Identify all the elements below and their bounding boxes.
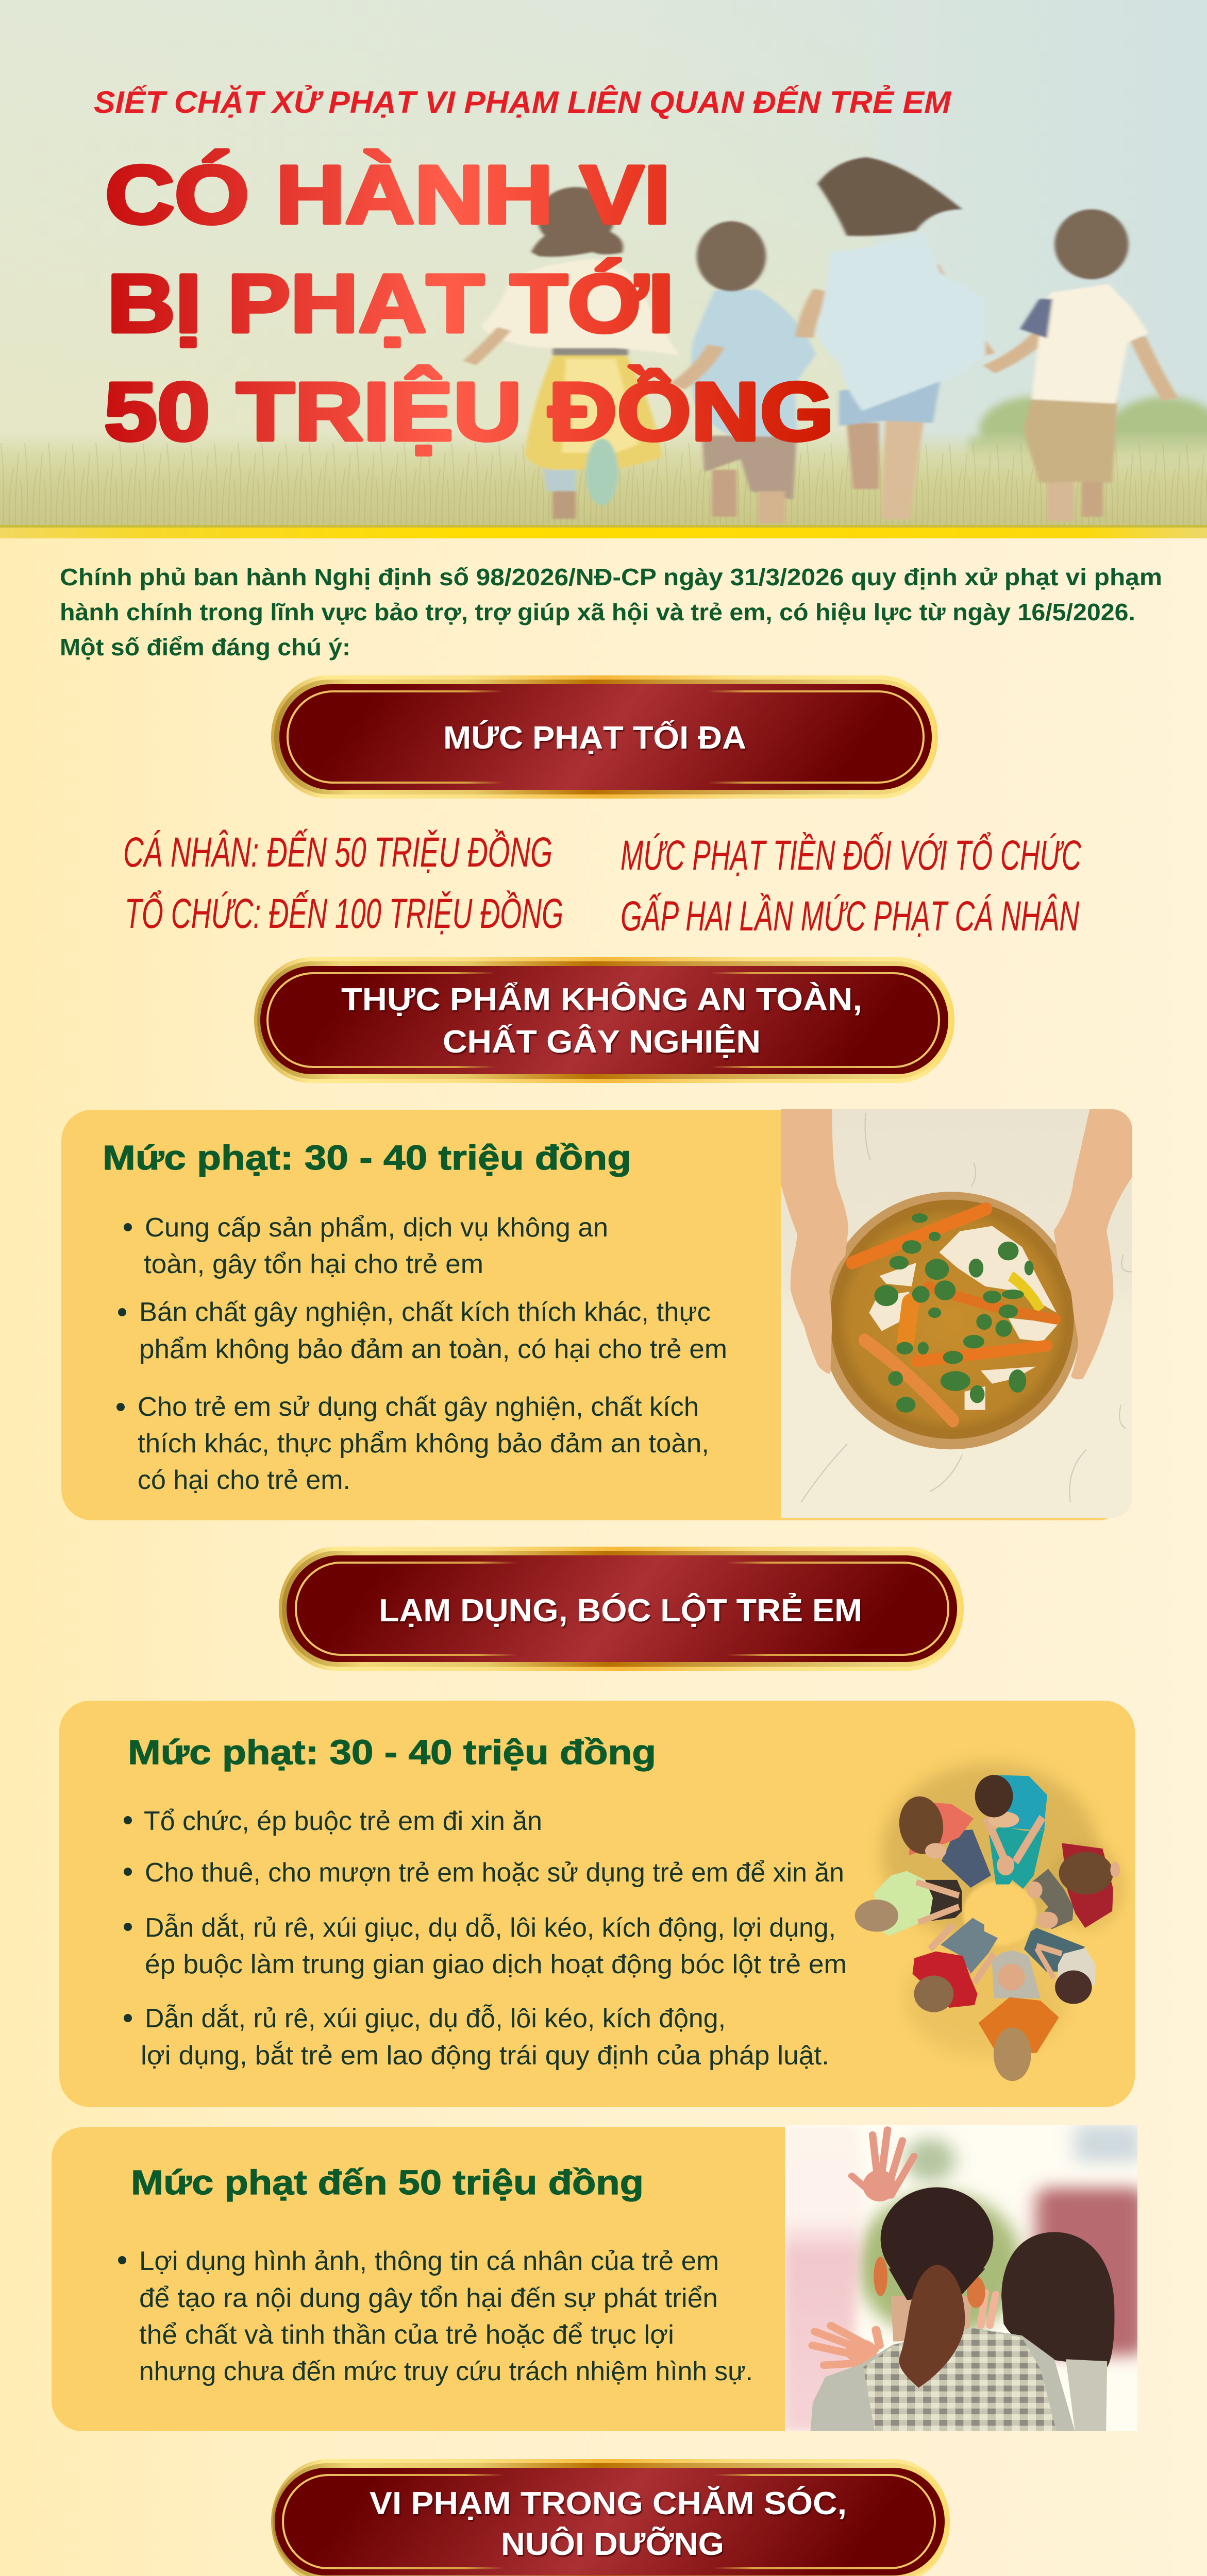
banner: mức phạt tối đa: MỨC PHẠT TỐI ĐA bbox=[443, 720, 746, 756]
bullet list: Cung cấp sản phẩm, dịch vụ không an bbox=[145, 1213, 608, 1243]
red shirt boy bottom-left bbox=[941, 1918, 998, 1974]
bullet list: Tổ chức, ép buộc trẻ em đi xin ăn bbox=[144, 1806, 542, 1836]
warm haze bbox=[0, 212, 876, 447]
banner: mức phạt tối đa bbox=[271, 675, 938, 799]
sky bbox=[0, 0, 1207, 453]
banner: lạm dụng, bóc lột: LẠM DỤNG, BÓC LỘT TRẺ EM bbox=[379, 1593, 862, 1629]
grey shirt girl bbox=[1024, 1928, 1085, 1972]
photo: hands holding a food bowl bbox=[780, 1109, 1137, 1518]
red shirt boy right bbox=[1029, 1869, 1074, 1929]
cilantro bbox=[875, 1213, 1034, 1413]
yellow band under hero bbox=[0, 525, 1207, 538]
heading: Mức phạt: 30 - 40 triệu đồng bbox=[103, 1139, 631, 1177]
cream bbox=[869, 1226, 1059, 1410]
banner: thực phẩm không an toàn: CHẤT GÂY NGHIỆN bbox=[443, 1024, 761, 1060]
coral shirt girl bbox=[942, 1829, 991, 1888]
bullet list bbox=[118, 2246, 753, 2386]
bullet list: Dẫn dắt, rủ rê, xúi giục, dụ dỗ, lôi kéo, kích động, lợi dụng, bbox=[145, 1913, 836, 1943]
bullet list: để tạo ra nội dung gây tổn hại đến sự phát triển bbox=[139, 2283, 718, 2313]
kicker headline: SIẾT CHẶT XỬ PHẠT VI PHẠM LIÊN QUAN ĐẾN TRẺ EM bbox=[94, 85, 952, 120]
grass bbox=[0, 430, 1207, 528]
bullet list: Bán chất gây nghiện, chất kích thích khác, thực bbox=[139, 1297, 711, 1327]
maximum fine lines bbox=[123, 828, 1082, 940]
child with yellow skirt bbox=[470, 187, 679, 519]
page background, lower part bbox=[0, 1546, 1207, 2576]
teal shirt girl bbox=[989, 1826, 1044, 1889]
bullet list: Lợi dụng hình ảnh, thông tin cá nhân của trẻ em bbox=[139, 2246, 719, 2276]
bullet list bbox=[124, 1806, 847, 2071]
orange shirt boy bbox=[992, 1951, 1041, 1998]
bullet list: có hại cho trẻ em. bbox=[138, 1465, 350, 1495]
banner: vi phạm trong chăm sóc: NUÔI DƯỠNG bbox=[501, 2527, 724, 2562]
boy with white shirt holding hands bbox=[989, 209, 1170, 521]
panel: lạm dụng 30-40 triệu bbox=[59, 1701, 1135, 2107]
bullet list: ép buộc làm trung gian giao dịch hoạt động bóc lột trẻ em bbox=[145, 1950, 847, 1979]
green shirt boy bbox=[925, 1880, 962, 1921]
banner: vi phạm trong chăm sóc: VI PHẠM TRONG CHĂM SÓC, bbox=[370, 2486, 847, 2521]
bullet list: thích khác, thực phẩm không bảo đảm an toàn, bbox=[138, 1429, 709, 1459]
bullet list: Cho thuê, cho mượn trẻ em hoặc sử dụng trẻ em để xin ăn bbox=[145, 1858, 844, 1888]
banner: lạm dụng, bóc lột bbox=[279, 1547, 964, 1671]
bullet list: phẩm không bảo đảm an toàn, có hại cho trẻ em bbox=[139, 1334, 727, 1364]
child with blue shirt bbox=[677, 221, 816, 523]
bullet list: thể chất và tinh thần của trẻ hoặc để trục lợi bbox=[139, 2320, 674, 2350]
mother bbox=[891, 2296, 971, 2342]
illustration: children sitting in a circle bbox=[855, 1764, 1126, 2081]
main title: 50 TRIỆU ĐỒNG bbox=[104, 365, 834, 457]
banner: thực phẩm không an toàn: THỰC PHẨM KHÔNG AN TOÀN, bbox=[341, 982, 862, 1018]
heading: Mức phạt: 30 - 40 triệu đồng bbox=[128, 1733, 656, 1772]
child head bbox=[1001, 2232, 1114, 2367]
card background bbox=[52, 2127, 804, 2431]
panel: thực phẩm bbox=[61, 1109, 1137, 1520]
bullet list: Cho trẻ em sử dụng chất gây nghiện, chất kích bbox=[138, 1392, 699, 1422]
intro paragraph bbox=[60, 564, 1162, 660]
intro paragraph: hành chính trong lĩnh vực bảo trợ, trợ giúp xã hội và trẻ em, có hiệu lực từ ngày 16/5/2026. bbox=[60, 599, 1135, 625]
main title bbox=[104, 148, 834, 457]
carrots bbox=[852, 1209, 1057, 1420]
hero photo: children running in a field bbox=[0, 0, 1207, 528]
maximum fine lines: TỔ CHỨC: ĐẾN 100 TRIỆU ĐỒNG bbox=[125, 890, 563, 937]
hands bbox=[780, 1110, 1132, 1378]
intro paragraph: Chính phủ ban hành Nghị định số 98/2026/NĐ-CP ngày 31/3/2026 quy định xử phạt vi phạm bbox=[60, 564, 1162, 590]
child with striped dress and flying hair bbox=[804, 157, 989, 519]
photo: mother and child at a window bbox=[783, 2125, 1146, 2432]
banner: thực phẩm không an toàn bbox=[254, 957, 954, 1083]
page background bbox=[0, 0, 1207, 1546]
bullet list bbox=[116, 1213, 727, 1495]
heading: Mức phạt đến 50 triệu đồng bbox=[131, 2163, 644, 2202]
bullet list: toàn, gây tổn hại cho trẻ em bbox=[144, 1249, 483, 1279]
bullet list: nhưng chưa đến mức truy cứu trách nhiệm hình sự. bbox=[139, 2357, 753, 2386]
distant trees bbox=[969, 397, 1207, 464]
card background bbox=[59, 1701, 1135, 2107]
intro paragraph: Một số điểm đáng chú ý: bbox=[60, 634, 350, 660]
bullet list: Dẫn dắt, rủ rê, xúi giục, dụ đỗ, lôi kéo, kích động, bbox=[145, 2004, 726, 2033]
panel: lạm dụng đến 50 triệu bbox=[52, 2125, 1146, 2432]
card background bbox=[61, 1110, 1128, 1520]
main title: CÓ HÀNH VI bbox=[105, 148, 670, 241]
main title: BỊ PHẠT TỚI bbox=[107, 257, 674, 349]
maximum fine lines: CÁ NHÂN: ĐẾN 50 TRIỆU ĐỒNG bbox=[123, 828, 552, 876]
banner: vi phạm trong chăm sóc bbox=[271, 2459, 950, 2576]
grass texture bbox=[0, 443, 1207, 526]
bullet list: lợi dụng, bắt trẻ em lao động trái quy định của pháp luật. bbox=[141, 2041, 829, 2071]
